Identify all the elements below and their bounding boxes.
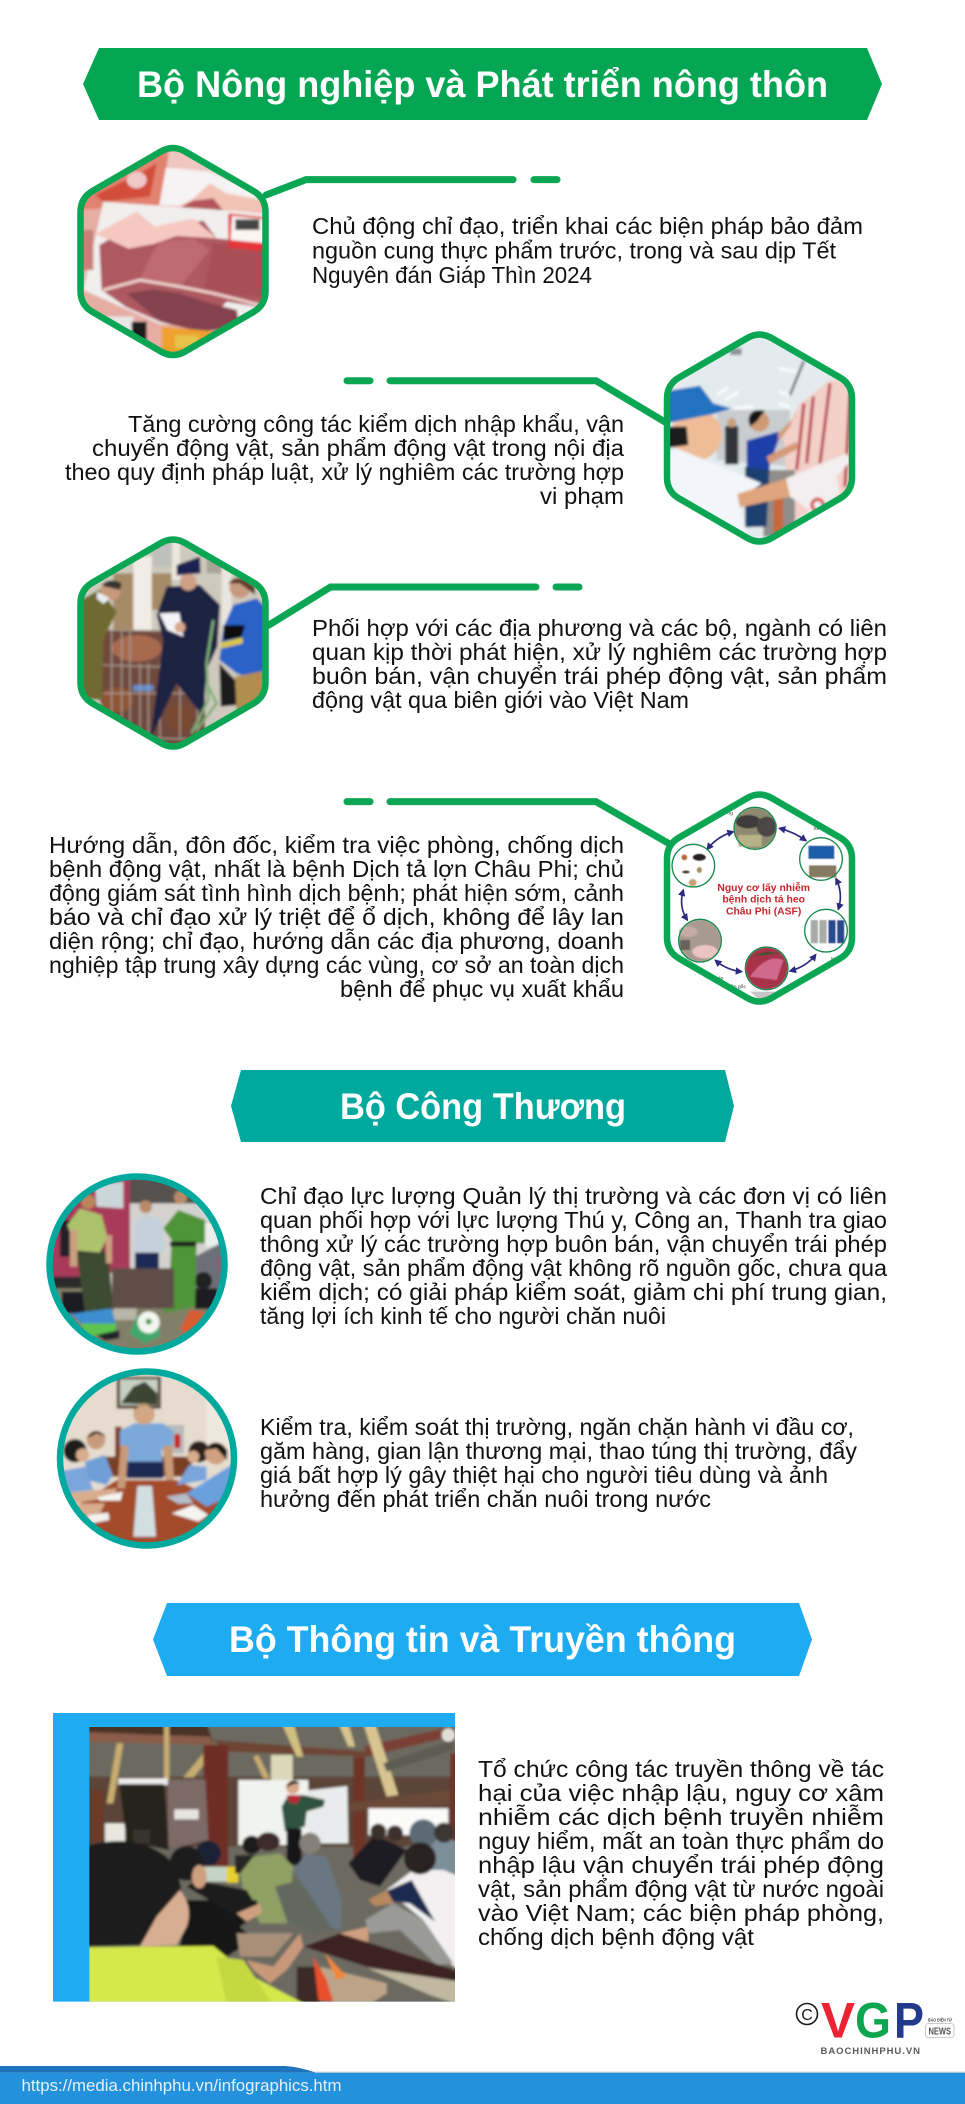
photo: inspectors at table	[63, 1374, 231, 1542]
fragments of diagram captions: Ng	[831, 957, 838, 963]
photo: officers with seized cage	[52, 1180, 222, 1348]
text block 4: nghiệp tập trung xây dựng các vùng, cơ sở an toàn dịch	[49, 952, 624, 978]
heading: Bộ Công Thương	[231, 1070, 734, 1142]
circle frame 2	[60, 1372, 234, 1546]
center caption: Nguy cơ lấy nhiễm	[717, 881, 810, 894]
text block 7: nhiễm các dịch bệnh truyền nhiễm	[478, 1804, 884, 1830]
circle frame 1	[50, 1176, 224, 1352]
center caption: Châu Phi (ASF)	[726, 906, 801, 917]
circle: rodents and insects	[680, 850, 707, 886]
text block 1	[312, 213, 863, 288]
connector line 4	[347, 802, 668, 843]
panel: communication	[53, 1713, 884, 2007]
photo: inspectors and chicken cage	[84, 542, 262, 744]
fragments of diagram captions	[715, 811, 838, 990]
photo: community training session	[83, 1723, 460, 2007]
cycle arrows	[682, 828, 840, 972]
photo: workers with pork carcasses	[670, 338, 849, 538]
panel: item 2 quarantine	[65, 327, 863, 547]
text block 2: chuyển động vật, sản phẩm động vật trong nội địa	[92, 435, 625, 461]
text block 4: Hướng dẫn, đôn đốc, kiểm tra việc phòng, chống dịch	[49, 832, 624, 858]
text block 6: găm hàng, gian lận thương mại, thao túng thị trường, đẩy	[260, 1438, 857, 1464]
text block 3	[312, 615, 887, 713]
text block 4	[49, 832, 624, 1002]
heading: Bộ Nông nghiệp và Phát triển nông thôn	[83, 48, 882, 120]
text block 4: báo và chỉ đạo xử lý triệt để ổ dịch, không để lây lan	[49, 904, 624, 930]
connector line 3	[269, 587, 579, 625]
connector line 1	[266, 180, 557, 195]
text block 7: vật, sản phẩm động vật từ nước ngoài	[478, 1876, 884, 1902]
source URL: https://media.chinhphu.vn/infographics.htm	[22, 2076, 342, 2095]
text block 4: bệnh để phục vụ xuất khẩu	[340, 976, 624, 1002]
text block 1: Chủ động chỉ đạo, triển khai các biện pháp bảo đảm	[312, 213, 863, 239]
circle: raw meat	[746, 947, 788, 989]
text block 5: động vật, sản phẩm động vật không rõ nguồn gốc, chưa qua	[260, 1255, 888, 1281]
text block 7	[478, 1756, 884, 1950]
text block 6: hưởng đến phát triển chăn nuôi trong nước	[260, 1486, 711, 1512]
logo: VGP News	[796, 1993, 954, 2057]
text block 3: buôn bán, vận chuyển trái phép động vật, sản phẩm	[312, 663, 887, 689]
text block 7: vào Việt Nam; các biện pháp phòng,	[478, 1900, 884, 1926]
text block 7: nhập lậu vận chuyển trái phép động	[478, 1852, 884, 1878]
circle: workers	[810, 919, 846, 944]
text block 3: quan kịp thời phát hiện, xử lý nghiêm các trường hợp	[312, 639, 887, 665]
text block 5	[260, 1183, 888, 1329]
text block 7: Tổ chức công tác truyền thông về tác	[478, 1756, 884, 1782]
hexagon frame 4	[667, 794, 852, 1002]
circle: pigs	[734, 808, 777, 849]
panel: item 1 food supply	[70, 137, 863, 367]
text block 7: chống dịch bệnh động vật	[478, 1924, 754, 1950]
text block 1: nguồn cung thực phẩm trước, trong và sau dịp Tết	[312, 238, 836, 264]
text block 4: diện rộng; chỉ đạo, hướng dẫn các địa phương, doanh	[49, 928, 624, 954]
text block 2	[65, 411, 625, 509]
text block 6: Kiểm tra, kiểm soát thị trường, ngăn chặn hành vi đầu cơ,	[260, 1414, 854, 1440]
logo: VGP News: P	[894, 1993, 924, 2049]
heading: Bộ Thông tin và Truyền thông	[153, 1603, 812, 1676]
fragments of diagram captions: Xe	[813, 826, 820, 832]
text block 2: theo quy định pháp luật, xử lý nghiêm các trường hợp	[65, 459, 624, 485]
text block 5: tăng lợi ích kinh tế cho người chăn nuôi	[260, 1303, 666, 1329]
center caption: bệnh dịch tả heo	[722, 895, 805, 906]
center caption	[717, 881, 810, 917]
heading: Bộ Nông nghiệp và Phát triển nông thôn: Bộ Nông nghiệp và Phát triển nông thôn	[137, 64, 828, 105]
hexagon frame 3	[80, 540, 266, 746]
panel: item 4 disease prevention	[49, 787, 867, 1010]
text block 6	[260, 1414, 857, 1512]
text block 3: động vật qua biên giới vào Việt Nam	[312, 687, 689, 713]
text block 5: thông xử lý các trường hợp buôn bán, vận chuyển trái phép	[260, 1231, 887, 1257]
panel: item 3 coordination	[70, 530, 887, 757]
text block 5: Chỉ đạo lực lượng Quản lý thị trường và các đơn vị có liên	[260, 1183, 887, 1209]
hexagon frame 2	[667, 334, 852, 542]
photo: packaged pork	[84, 151, 262, 352]
text block 5: quan phối hợp với lực lượng Thú y, Công an, Thanh tra giao	[260, 1207, 887, 1233]
text block 2: Tăng cường công tác kiểm dịch nhập khẩu, vận	[128, 411, 624, 437]
logo: VGP News: C	[801, 2007, 813, 2024]
diagram: ASF infection risk cycle	[671, 806, 848, 998]
text block 7: nguy hiểm, mất an toàn thực phẩm do	[478, 1828, 884, 1854]
text block 5: kiểm dịch; có giải pháp kiểm soát, giảm chi phí trung gian,	[260, 1279, 887, 1305]
text block 2: vi phạm	[540, 483, 624, 509]
text block 4: bệnh động vật, nhất là bệnh Dịch tả lợn Châu Phi; chủ	[49, 856, 624, 882]
circle: piglets	[679, 920, 721, 962]
logo: VGP News: V	[821, 1993, 856, 2049]
fragments of diagram captions: ồn gốc	[731, 984, 746, 990]
text block 4: động giám sát tình hình dịch bệnh; phát hiện sớm, cảnh	[49, 880, 624, 906]
heading: Bộ Công Thương: Bộ Công Thương	[340, 1086, 626, 1127]
text block 7: hại của việc nhập lậu, nguy cơ xâm	[478, 1780, 884, 1806]
panel: market inspection meeting	[50, 1363, 857, 1553]
text block 3: Phối hợp với các địa phương và các bộ, ngành có liên	[312, 615, 887, 641]
logo: VGP News: BÁO ĐIỆN TỬ	[928, 2016, 952, 2022]
connector line 2	[347, 381, 665, 422]
logo: VGP News: G	[855, 1993, 891, 2049]
logo: VGP News: NEWS	[928, 2026, 951, 2038]
fragments of diagram captions: hép	[715, 975, 724, 981]
footer bar	[0, 2066, 965, 2104]
circle: trucks	[808, 845, 837, 878]
logo: VGP News: BAOCHINHPHU.VN	[820, 2046, 920, 2057]
text block 1: Nguyên đán Giáp Thìn 2024	[312, 262, 592, 288]
panel: market management officers with seized animals	[40, 1170, 888, 1360]
hexagon frame 1	[80, 148, 266, 355]
fragments of diagram captions: ng	[727, 811, 733, 817]
blue photo backing	[53, 1713, 455, 2002]
text block 6: giá bất hợp lý gây thiệt hại cho người tiêu dùng và ảnh	[260, 1462, 828, 1488]
heading: Bộ Thông tin và Truyền thông: Bộ Thông tin và Truyền thông	[229, 1619, 736, 1660]
